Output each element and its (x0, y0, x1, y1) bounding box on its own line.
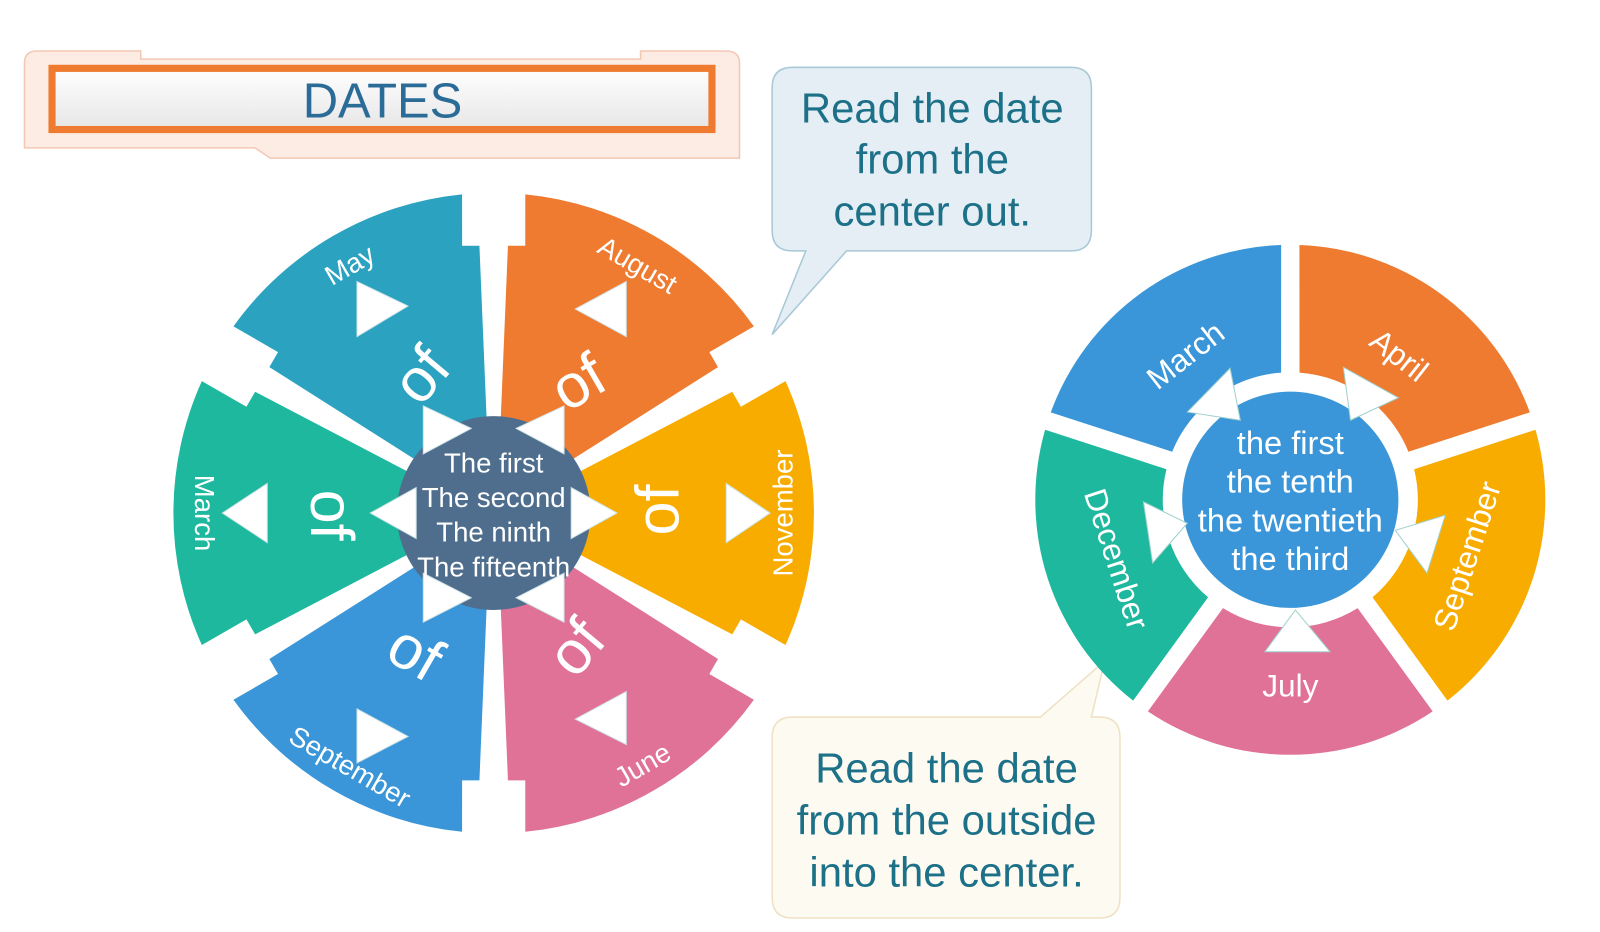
month labels: December (1077, 484, 1156, 634)
month labels: September (1426, 477, 1508, 635)
month labels: July (1262, 668, 1319, 704)
month labels: May (319, 238, 380, 291)
of labels: of (623, 483, 691, 536)
of labels: of (533, 605, 619, 689)
segment: June (398, 480, 768, 856)
of labels: of (539, 339, 618, 424)
of labels: of (378, 333, 464, 416)
segment: November (531, 381, 814, 645)
center text: The first (444, 447, 544, 478)
center text: the third (1231, 540, 1349, 577)
of labels: of (376, 610, 455, 695)
month labels: September (284, 720, 416, 814)
center text: the tenth (1227, 463, 1354, 500)
inner arrows (370, 406, 617, 622)
of labels (298, 333, 691, 695)
callout: bottom: from the outside (797, 796, 1096, 843)
callout: bottom: into the center. (809, 848, 1084, 895)
segment: March (1025, 210, 1342, 496)
center text: The second (422, 482, 566, 513)
center circle (1182, 392, 1398, 608)
segment: March (173, 381, 456, 645)
center text: The fifteenth (417, 551, 570, 582)
month labels: November (768, 450, 799, 577)
month labels: April (1363, 321, 1435, 389)
callout: top (772, 67, 1091, 335)
center text: the first (1237, 424, 1344, 461)
callout: bottom (772, 661, 1120, 918)
left wheel (173, 170, 814, 856)
callout: top: center out. (833, 187, 1031, 234)
segment: May (219, 170, 589, 546)
segment: September (219, 480, 589, 856)
center text: The ninth (436, 517, 551, 548)
segment: August (398, 170, 768, 546)
month labels (189, 230, 799, 814)
center circle (397, 416, 591, 610)
segment: September (1349, 398, 1577, 714)
month labels: March (1140, 314, 1231, 396)
month labels (1077, 314, 1508, 704)
month labels: June (609, 736, 676, 793)
arrows (1143, 367, 1445, 652)
month labels: March (189, 475, 220, 551)
outer arrows (222, 282, 770, 763)
title (24, 51, 740, 158)
right wheel (1004, 210, 1577, 755)
title: DATES (303, 74, 462, 128)
center text: the twentieth (1198, 501, 1383, 538)
callout: top: from the (856, 135, 1009, 182)
of labels: of (298, 490, 366, 542)
segment: July (1148, 608, 1433, 755)
callout: bottom: Read the date (815, 744, 1078, 791)
segment: December (1004, 398, 1231, 714)
month labels: August (593, 230, 683, 300)
callout: top: Read the date (801, 84, 1064, 131)
segment: April (1239, 210, 1555, 496)
